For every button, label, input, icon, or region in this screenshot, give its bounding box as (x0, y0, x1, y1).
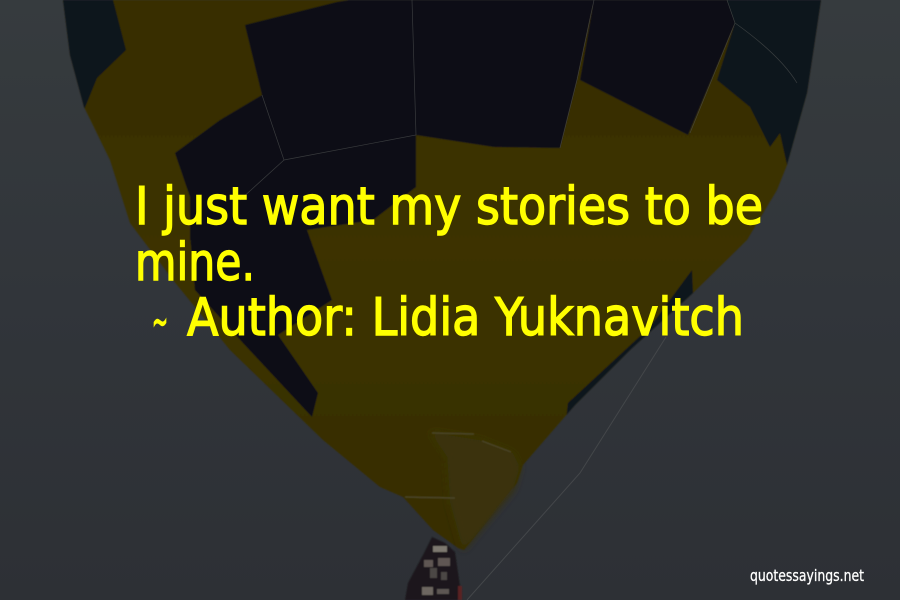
quote line 2: mine. (135, 233, 255, 293)
balloon yellow base (63, 0, 821, 550)
lighter neck patch (430, 432, 520, 550)
author name: Author: Lidia Yuknavitch (187, 288, 744, 348)
rope (467, 337, 666, 600)
attribution: ~ (152, 299, 168, 345)
watermark: quotessayings.net (750, 566, 864, 585)
attribution (152, 288, 744, 348)
quote text (135, 177, 763, 293)
hot air balloon envelope (55, 0, 830, 550)
basket and burner (405, 537, 462, 600)
seams (240, 0, 797, 200)
navy panels (55, 0, 830, 420)
neck crease highlights (405, 433, 511, 498)
quote line 1: I just want my stories to be (135, 177, 763, 237)
